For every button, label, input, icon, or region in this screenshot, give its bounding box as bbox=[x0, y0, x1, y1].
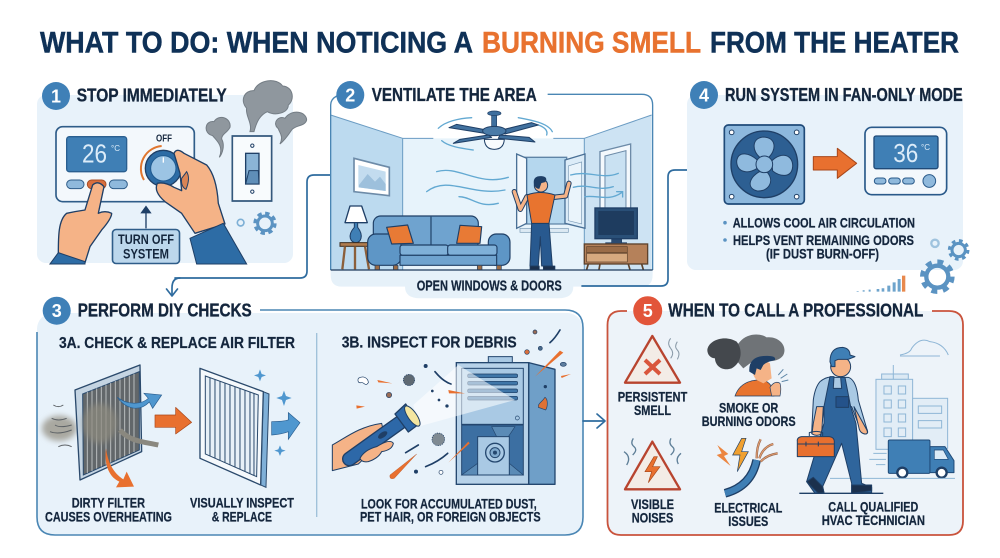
heading badge 1: 1 bbox=[51, 86, 61, 106]
callout: turn off system: TURN OFF bbox=[118, 232, 174, 247]
icon: warning visible noises bbox=[624, 438, 681, 489]
label: call qualified hvac technician: HVAC TECHNICIAN bbox=[822, 512, 925, 528]
subheading 3b: 3B. INSPECT FOR DEBRIS bbox=[342, 335, 517, 352]
label: visible noises: NOISES bbox=[632, 510, 673, 526]
panel: step 1 stop immediately bbox=[37, 81, 307, 264]
illustration: thermostat, hands, switch and smoke bbox=[50, 81, 307, 264]
bullet list bbox=[723, 214, 915, 262]
icon: electrical issues bbox=[717, 438, 778, 493]
title: FROM THE HEATER bbox=[710, 27, 959, 60]
flashlight bbox=[349, 423, 400, 459]
label: call qualified hvac technician: CALL QUALIFIED bbox=[828, 499, 918, 515]
thermostat reading: °C bbox=[111, 144, 120, 153]
caption: dirty filter: DIRTY FILTER bbox=[72, 495, 145, 511]
label: visible noises: VISIBLE bbox=[631, 496, 674, 512]
window bbox=[522, 157, 567, 224]
picture bbox=[354, 158, 389, 196]
caption: debris: PET HAIR, OR FOREIGN OBJECTS bbox=[360, 509, 541, 525]
illustration: dirty filter and clean filter bbox=[42, 365, 300, 487]
caption: OPEN WINDOWS & DOORS bbox=[417, 278, 562, 295]
thermostat reading: 36 bbox=[893, 138, 918, 168]
callout: turn off system: SYSTEM bbox=[123, 246, 169, 262]
title bbox=[40, 27, 959, 60]
panel: step 2 ventilate the area bbox=[331, 81, 653, 298]
bullet list: ALLOWS COOL AIR CIRCULATION bbox=[733, 214, 915, 230]
off label: OFF bbox=[156, 134, 172, 145]
caption: visually inspect: & REPLACE bbox=[212, 509, 272, 525]
bullet list: HELPS VENT REMAINING ODORS bbox=[733, 232, 914, 248]
panel: step 4 run system in fan-only mode bbox=[687, 81, 968, 292]
illustration: building, truck and cloud bbox=[830, 340, 955, 478]
label: smoke or burning odors: SMOKE OR bbox=[719, 399, 778, 415]
panel: step 3 perform diy checks bbox=[37, 297, 583, 535]
heading badge 3 bbox=[43, 297, 71, 325]
illustration: hvac technician bbox=[797, 347, 883, 493]
label: electrical issues: ELECTRICAL bbox=[714, 499, 783, 515]
subheading 3a: 3A. CHECK & REPLACE AIR FILTER bbox=[59, 335, 295, 352]
caption: visually inspect bbox=[190, 495, 294, 525]
label: smoke or burning odors: BURNING ODORS bbox=[702, 413, 796, 429]
heading badge 2: 2 bbox=[345, 86, 355, 106]
heading: VENTILATE THE AREA bbox=[372, 84, 537, 105]
title: BURNING SMELL bbox=[482, 27, 701, 60]
heading badge 5: 5 bbox=[643, 301, 653, 321]
callout: turn off system bbox=[112, 230, 180, 264]
ceiling fan bbox=[449, 111, 538, 149]
balcony door bbox=[600, 144, 631, 208]
label: persistent smell bbox=[618, 389, 688, 418]
label: persistent smell: PERSISTENT bbox=[618, 389, 688, 405]
illustration: fan, arrow, thermostat bbox=[724, 125, 968, 292]
arrow: step 1 to step 2 bbox=[175, 168, 341, 278]
heading: PERFORM DIY CHECKS bbox=[78, 300, 252, 321]
heading badge 4 bbox=[690, 81, 718, 109]
room illustration bbox=[331, 94, 653, 298]
heading badge 1 bbox=[42, 82, 70, 110]
panel: step 5 when to call a professional bbox=[608, 296, 963, 535]
person opening window bbox=[514, 177, 569, 270]
wind lines bbox=[427, 118, 623, 205]
arrow: step 3 to step 5 bbox=[583, 414, 605, 428]
right hand turning the knob bbox=[156, 150, 225, 233]
label: visible noises bbox=[631, 496, 674, 526]
label: electrical issues: ISSUES bbox=[728, 513, 768, 529]
heading: STOP IMMEDIATELY bbox=[77, 85, 227, 106]
left hand pressing the button bbox=[58, 183, 112, 263]
label: smoke or burning odors bbox=[702, 399, 796, 429]
caption: visually inspect: VISUALLY INSPECT bbox=[190, 495, 294, 511]
arrow: down to step 3 bbox=[166, 278, 180, 296]
label: persistent smell: SMELL bbox=[634, 402, 671, 418]
thermostat reading: °C bbox=[921, 143, 930, 152]
heading badge 2 bbox=[336, 81, 364, 109]
label: call qualified hvac technician bbox=[822, 499, 925, 528]
tv and stand bbox=[584, 208, 648, 270]
thermostat reading: 26 bbox=[82, 139, 107, 169]
icon: smoke and coughing person bbox=[707, 334, 788, 396]
label: electrical issues bbox=[714, 499, 783, 529]
heading badge 5 bbox=[633, 296, 662, 325]
bullet list: (IF DUST BURN-OFF) bbox=[766, 246, 879, 262]
sofa bbox=[368, 216, 510, 270]
heading badge 3: 3 bbox=[52, 301, 62, 321]
caption: debris bbox=[360, 495, 541, 525]
arm behind flashlight bbox=[332, 423, 385, 471]
illustration: flashlight and furnace bbox=[332, 330, 571, 484]
lamp and table bbox=[340, 206, 372, 269]
title: WHAT TO DO: WHEN NOTICING A bbox=[40, 27, 473, 60]
icon: warning persistent smell bbox=[625, 336, 680, 383]
heading: WHEN TO CALL A PROFESSIONAL bbox=[668, 300, 923, 321]
caption: dirty filter: CAUSES OVERHEATING bbox=[45, 509, 172, 525]
arrow: step 2 to step 4 bbox=[582, 163, 713, 286]
debris bbox=[358, 330, 566, 474]
caption: dirty filter bbox=[45, 495, 172, 525]
caption: debris: LOOK FOR ACCUMULATED DUST, bbox=[361, 495, 537, 511]
heading badge 4: 4 bbox=[699, 86, 709, 106]
fingers in front of flashlight bbox=[360, 441, 393, 462]
